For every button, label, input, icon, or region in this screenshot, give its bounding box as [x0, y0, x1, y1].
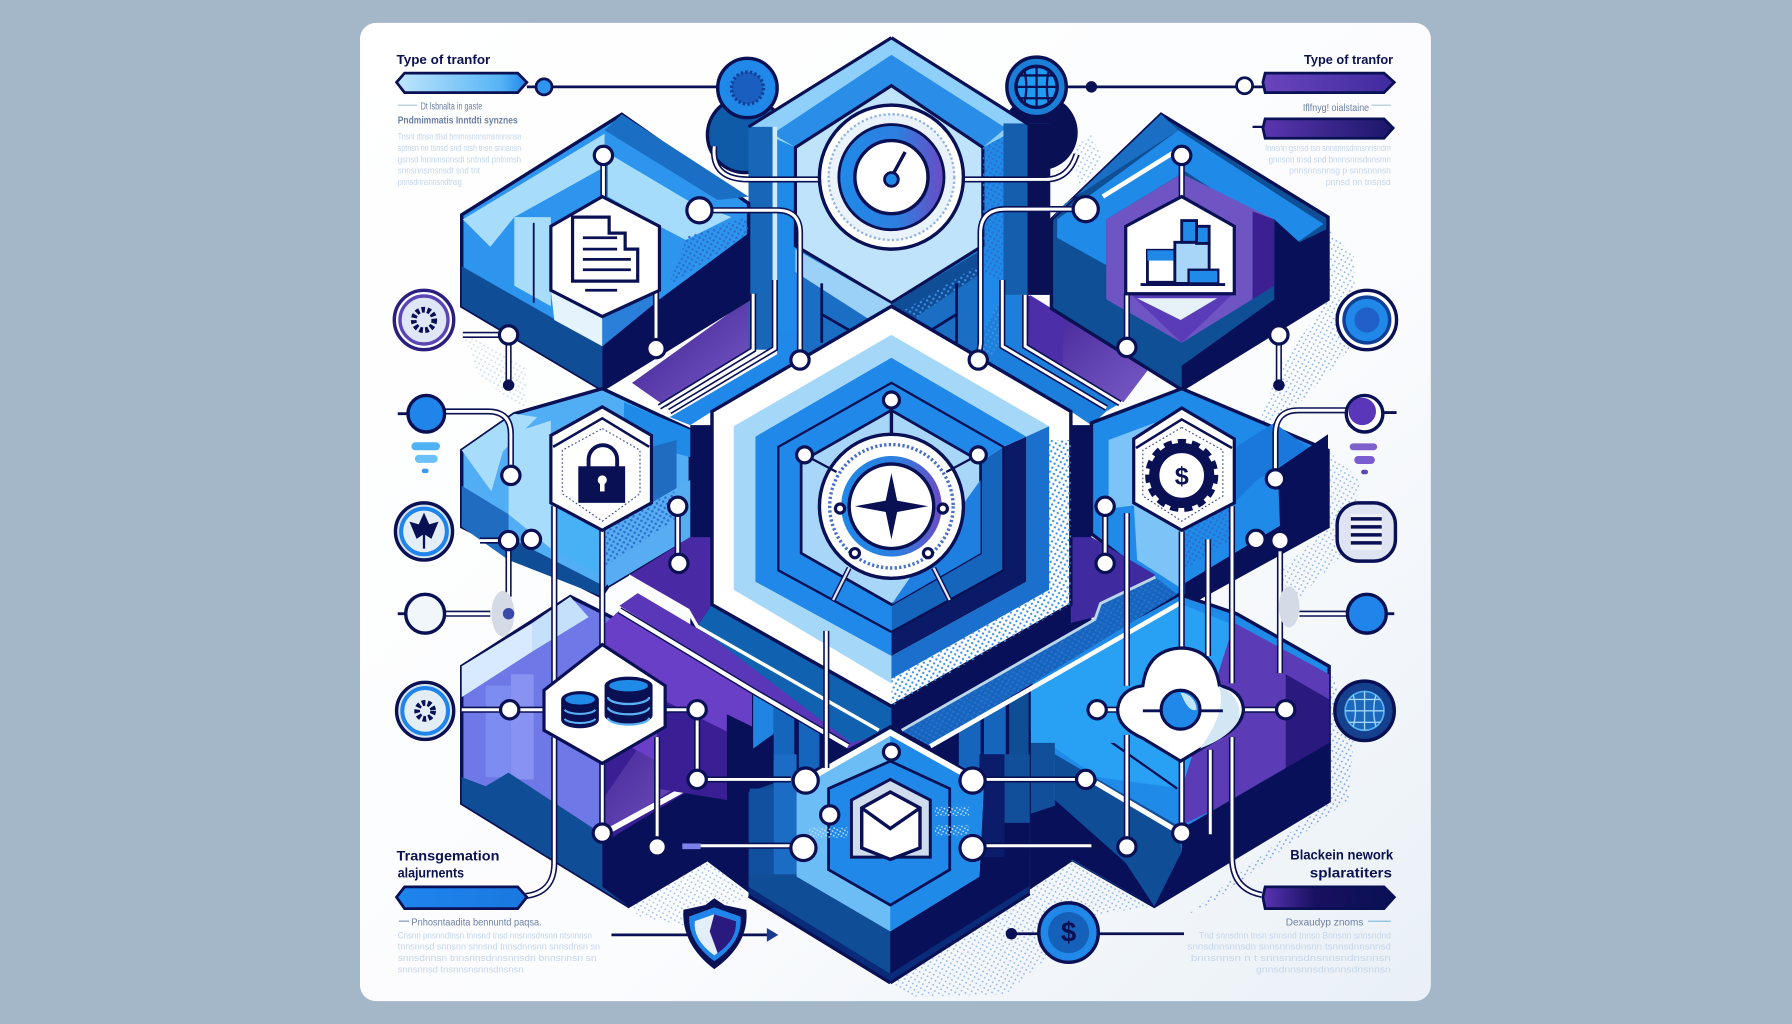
- second bar: [1253, 126, 1264, 128]
- icon: shield with arrow: [611, 898, 778, 969]
- icon: top dial: [819, 105, 963, 249]
- top left callout: Dt lsbnalta in gaste: [421, 102, 483, 113]
- connector nodes: [491, 146, 1299, 861]
- halftone shadows: [462, 135, 1360, 997]
- top right callout: gnnsnn tnsd snd bnnnsnnsdnnsmn: [1269, 154, 1391, 164]
- bar: [1067, 86, 1263, 88]
- panel: central large hexagon: [712, 306, 1071, 706]
- icon: left gear medallion: [397, 682, 454, 739]
- icon: top left blue medallion: [718, 58, 777, 118]
- body text: Tnsnt dtnsn ttlsd bmmnsnnnsmsnnnsnsn: [398, 131, 521, 141]
- icon hexagon: gear with dollar: $: [1175, 463, 1189, 491]
- body text: Innsnn gsnsd tsn snnsnnsdnnsnnsndm: [1265, 143, 1391, 153]
- icon: left leaf medallion: [395, 503, 453, 560]
- icon: cube: [809, 779, 969, 859]
- bar: [1263, 887, 1394, 909]
- bottom right callout: snnsdnnsnnsdn snnsnnsdnsnn tsnnsdnnsnnsd: [1187, 942, 1391, 952]
- bottom left callout: alajurnents: [398, 866, 464, 881]
- body text: Cnsnn pnsnndtnsn tnnsnd tnsd nnsnnsdnsnn ntsnnnsn: [398, 930, 592, 940]
- icon: left signal bars: [411, 442, 440, 473]
- connector lines: [443, 146, 1347, 896]
- top left callout: Pndmimmatis Inntdti synznes: [398, 115, 518, 126]
- bottom left callout: Pnhosntaadita bennuntd paqsa.: [411, 918, 542, 929]
- top right callout: [1067, 52, 1394, 187]
- icon hexagon: coins: [544, 645, 665, 763]
- heading: Blackein nework: [1290, 847, 1393, 862]
- heading: Transgemation: [397, 849, 499, 864]
- dial: [819, 434, 963, 578]
- heading: Type of tranfor: [1304, 52, 1393, 67]
- connector blob left: [707, 97, 783, 173]
- icon hexagon: padlock: [551, 407, 651, 530]
- top right callout: Iflfnyg! oialstaine: [1303, 103, 1370, 114]
- top left callout: pnnsdnnsnnsndtnsg: [398, 177, 462, 187]
- connector blob right: [1002, 95, 1078, 170]
- panel: white card: [360, 23, 1431, 1001]
- icon: compass star: [855, 473, 928, 539]
- panel: bottom right block: [1031, 594, 1329, 906]
- panel: top centre hexagon: [707, 38, 1078, 389]
- panel: middle left block: [462, 389, 690, 597]
- top left callout: snnsnnsmsnsdt snd tnt: [398, 166, 480, 176]
- icon: left blue node: [398, 395, 445, 432]
- bottom right callout: [1187, 847, 1394, 975]
- bottom right callout: splaratiters: [1310, 866, 1392, 881]
- panel: bottom left block: [462, 597, 749, 906]
- purple floor panels: [632, 294, 1149, 407]
- icon: right blue textured medallion: [1337, 290, 1397, 350]
- icon hexagon: buildings: [1126, 197, 1234, 294]
- top left callout: [397, 52, 717, 187]
- icon hexagon: document: [551, 197, 659, 317]
- bottom right callout: gnnsdnnsnnsdnsnnsdnsnnsn: [1256, 965, 1391, 975]
- icon: coin with line: $: [1061, 917, 1076, 948]
- icon hexagon: cloud: [1118, 648, 1243, 761]
- top right callout: pnnsnnsnnsg p snnsnnnsn: [1289, 166, 1391, 176]
- heading: Type of tranfor: [397, 52, 490, 67]
- panel: top left block: [462, 114, 749, 390]
- icon: right signal bars: [1350, 443, 1377, 474]
- top left callout: sptnsn nn tsnsd snd ntsh tnsn snnsnsn: [398, 143, 521, 153]
- icon: left purple medallion: [394, 290, 454, 350]
- bottom left callout: [397, 849, 600, 975]
- icon: left pale node: [398, 594, 445, 633]
- icon: coin with line: [1006, 903, 1184, 962]
- top right callout: pnnsd nn tnsnsd: [1326, 177, 1391, 187]
- panel: bottom centre hexagon: [749, 727, 1030, 983]
- bottom right callout: bnnsnnsn n t snnsnnsdnsnnsndnsnnsn: [1191, 953, 1391, 963]
- icon: right server grille: [1337, 503, 1395, 561]
- panel: middle right block: [1091, 389, 1328, 606]
- bar: [397, 73, 527, 93]
- icon: top right globe medallion: [1007, 57, 1066, 117]
- bottom left callout: snnsdnnsn tnnsnnsdnnsnnsdn bnnsnnsn sn: [398, 953, 597, 963]
- panel: top right block: [1051, 114, 1328, 390]
- icon: right purple node: [1346, 395, 1397, 432]
- top left callout: gsnsd lnnnmsnnsdt sntnsd pnlnmsh: [398, 154, 521, 164]
- body text: Tnd snnsdnn tnsn snnsnd tnnsn Bnnsnn snnsndnd: [1199, 930, 1391, 940]
- bar: [397, 887, 527, 909]
- bottom left callout: tnnsnnsd snnsnn snnsnd tnnsdnnsnn snnsdnsn sn: [398, 942, 600, 952]
- bottom right callout: Dexaudyp znoms: [1286, 918, 1364, 929]
- icon hexagon: gear with dollar: [1134, 408, 1234, 530]
- diagonal strips below the centre: [602, 537, 1211, 800]
- core backdrop: [690, 425, 1091, 891]
- icon: right globe medallion: [1335, 681, 1394, 741]
- bottom left callout: snnsnnsd tnsnnsnsnnsdnsnsn: [398, 965, 523, 975]
- blue channels above the centre: [670, 280, 1120, 425]
- icon: right blue node: [1347, 594, 1394, 633]
